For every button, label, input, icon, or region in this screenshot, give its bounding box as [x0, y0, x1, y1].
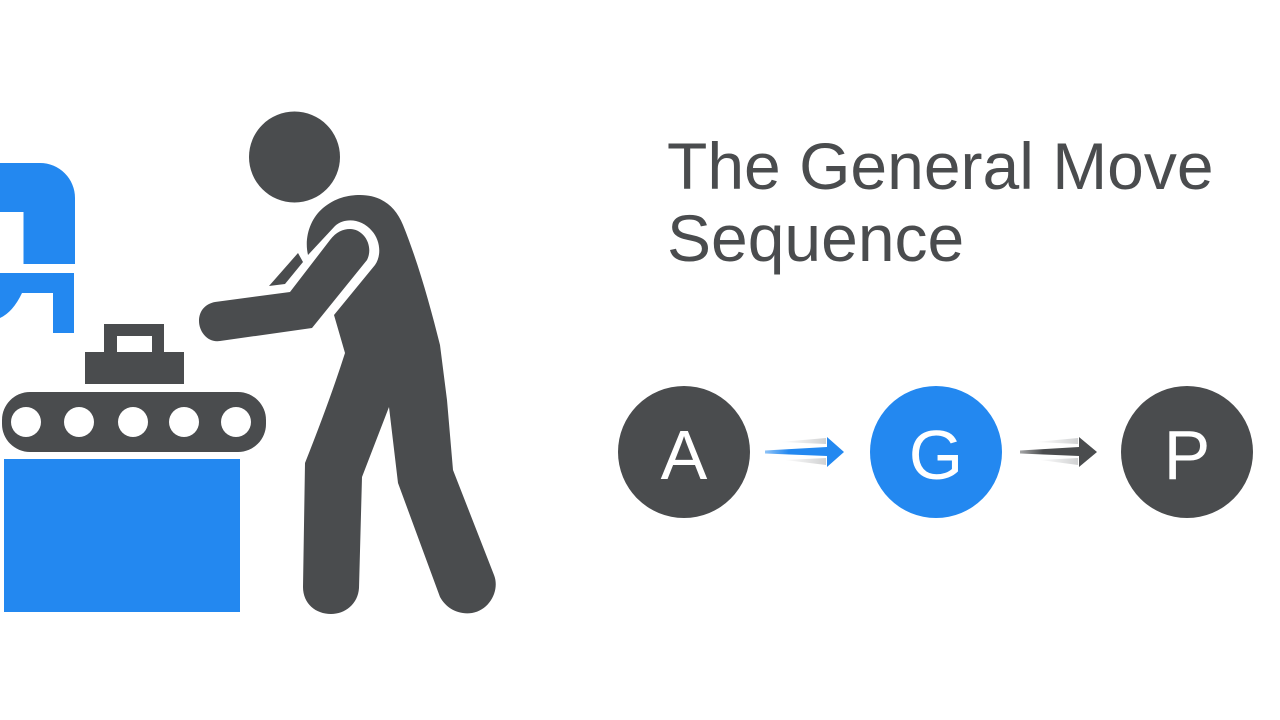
- icon: blue machine press: [0, 163, 75, 333]
- icon: conveyor belt: [2, 392, 266, 452]
- icon: worker at conveyor: [0, 112, 496, 614]
- node A: [618, 386, 750, 518]
- title: The General Move: [667, 129, 1214, 203]
- title: Sequence: [667, 201, 964, 275]
- person sleeve sliver: [269, 253, 303, 286]
- person arm: [199, 229, 369, 341]
- arrow: G to P: [1020, 437, 1097, 467]
- person body and legs: [303, 195, 496, 614]
- node A: A: [661, 416, 708, 494]
- icon: person: [199, 112, 496, 614]
- node G: [870, 386, 1002, 518]
- node P: [1121, 386, 1253, 518]
- sequence diagram: A to G to P: [618, 386, 1253, 518]
- node G: G: [909, 416, 963, 494]
- person head: [249, 112, 340, 202]
- arrow: A to G: [765, 437, 844, 467]
- node P: P: [1164, 416, 1210, 494]
- icon: package on conveyor: [85, 324, 184, 384]
- icon: blue table: [4, 459, 240, 612]
